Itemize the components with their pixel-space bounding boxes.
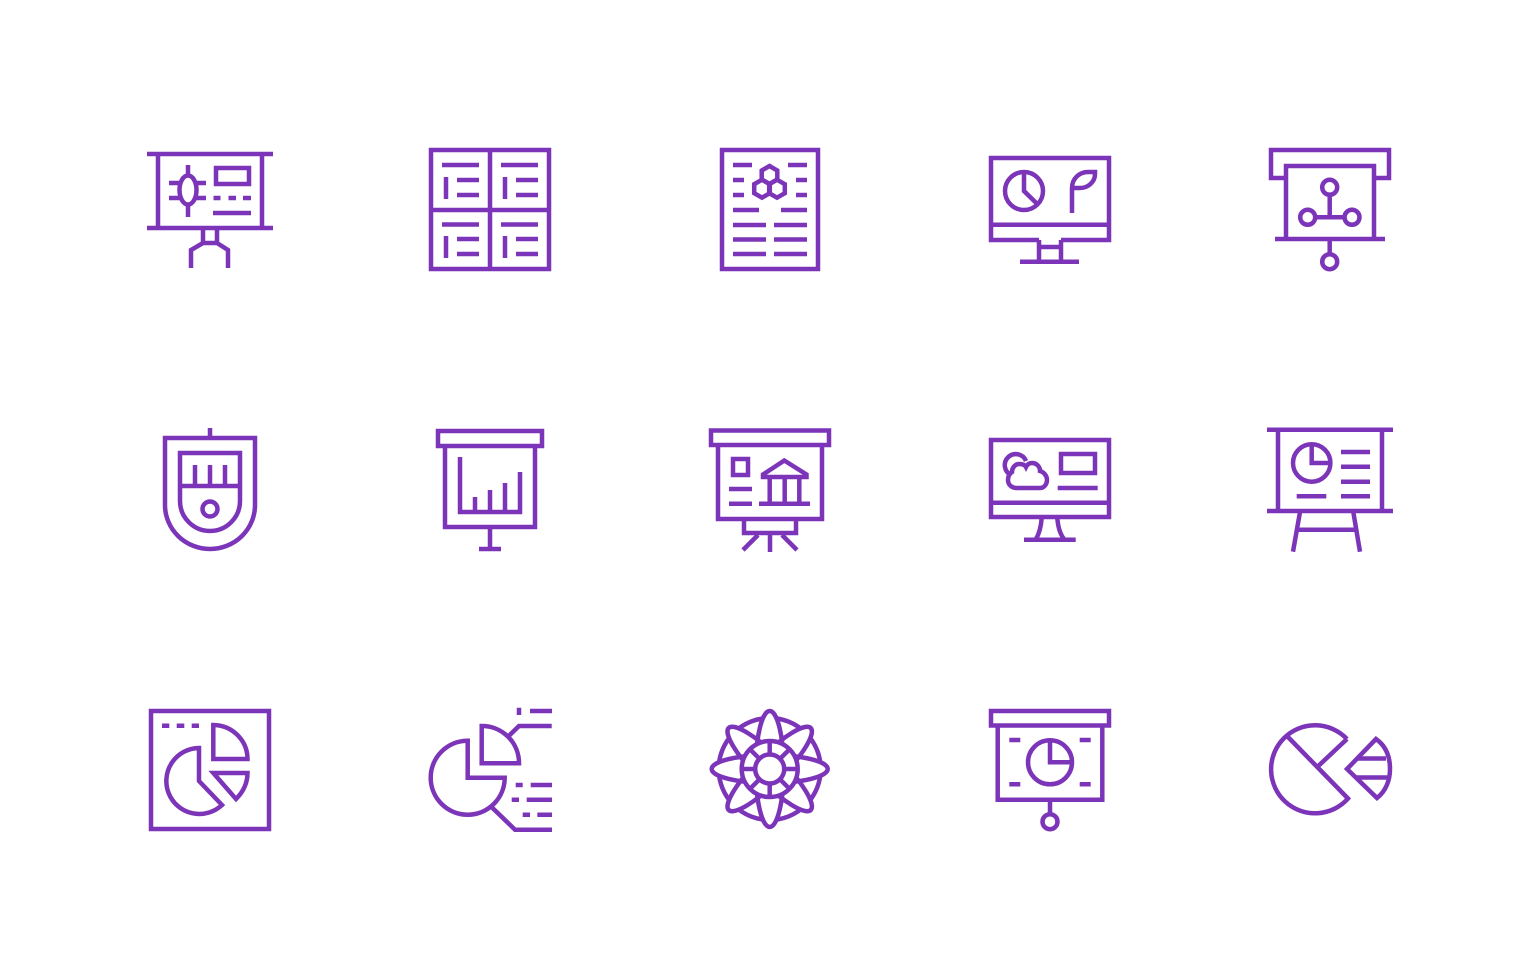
icon: document with hexagon molecule (722, 150, 818, 269)
icon: projector screen with network nodes (1271, 150, 1389, 269)
icon: projector screen with bar chart (438, 431, 542, 549)
icon: presentation board with bug chip (147, 154, 273, 268)
icon: flower rosette (712, 711, 828, 827)
icon: pie chart with callout lines (431, 708, 552, 830)
icon: four-panel document grid (431, 150, 549, 269)
icon: easel board with pie chart and text (1267, 430, 1393, 552)
icon: presentation board with bank building (711, 430, 829, 552)
icon: monitor with pie chart and leaf (991, 158, 1109, 262)
icon: pie chart with striped slice (1271, 725, 1390, 813)
icon: projector screen with pie chart (991, 711, 1109, 829)
icon: window with exploded pie chart (151, 711, 269, 829)
icon: monitor with weather cloud (991, 440, 1109, 540)
icon: shield badge with gauge (165, 428, 255, 549)
